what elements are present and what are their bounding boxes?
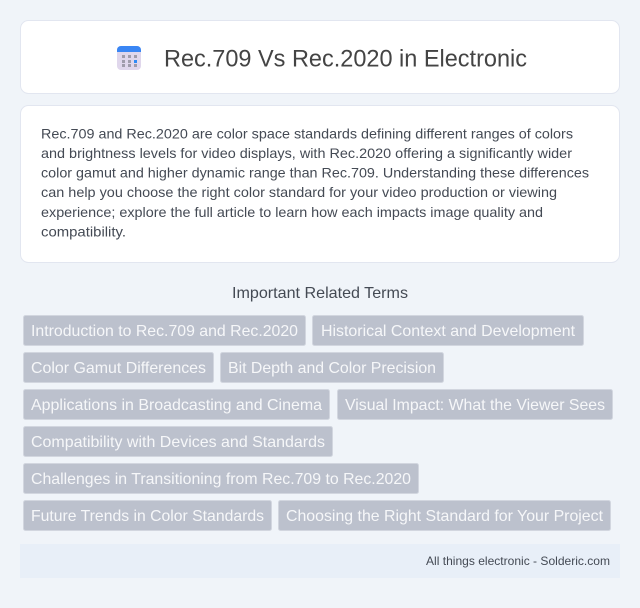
tag: [24, 426, 332, 456]
tag: Future Trends in Color Standards: [31, 508, 264, 525]
panel: summary: [20, 106, 620, 262]
tag: [24, 352, 214, 382]
summary text: and brightness levels for video displays, with Rec.2020 offering a significantly wider: [41, 145, 572, 161]
icon: calendar: [117, 46, 141, 70]
tag: [338, 390, 612, 420]
tag: Introduction to Rec.709 and Rec.2020: [31, 323, 298, 340]
tag: Compatibility with Devices and Standards: [31, 434, 325, 451]
tag: Challenges in Transitioning from Rec.709 to Rec.2020: [31, 471, 411, 488]
tag: [24, 464, 418, 494]
summary text: compatibility.: [41, 223, 126, 239]
tag: Bit Depth and Color Precision: [228, 360, 436, 377]
tag: [24, 390, 330, 420]
tag: Historical Context and Development: [321, 323, 576, 340]
tag: Applications in Broadcasting and Cinema: [31, 397, 322, 414]
summary text: [41, 126, 589, 239]
tag: Visual Impact: What the Viewer Sees: [345, 397, 605, 414]
summary text: Rec.709 and Rec.2020 are color space standards defining different ranges of colors: [41, 126, 573, 142]
tags: related terms: [24, 316, 612, 530]
summary text: color gamut and higher dynamic range than Rec.709. Understanding these differences: [41, 165, 589, 181]
tag: [220, 352, 444, 382]
summary text: experience; explore the full article to learn how each impacts image quality and: [41, 204, 543, 220]
summary text: can help you choose the right color standard for your video production or viewing: [41, 184, 557, 200]
tag: [312, 316, 584, 346]
tag: [24, 500, 272, 530]
heading: related terms: Important Related Terms: [232, 285, 408, 302]
tag: [24, 316, 306, 346]
tag: Color Gamut Differences: [31, 360, 206, 377]
header panel: [20, 20, 620, 94]
footer: All things electronic - Solderic.com: [426, 554, 610, 568]
tag: [278, 500, 610, 530]
footer: [20, 544, 620, 578]
tag: Choosing the Right Standard for Your Project: [286, 508, 604, 525]
title: Rec.709 Vs Rec.2020 in Electronic: [164, 46, 527, 72]
